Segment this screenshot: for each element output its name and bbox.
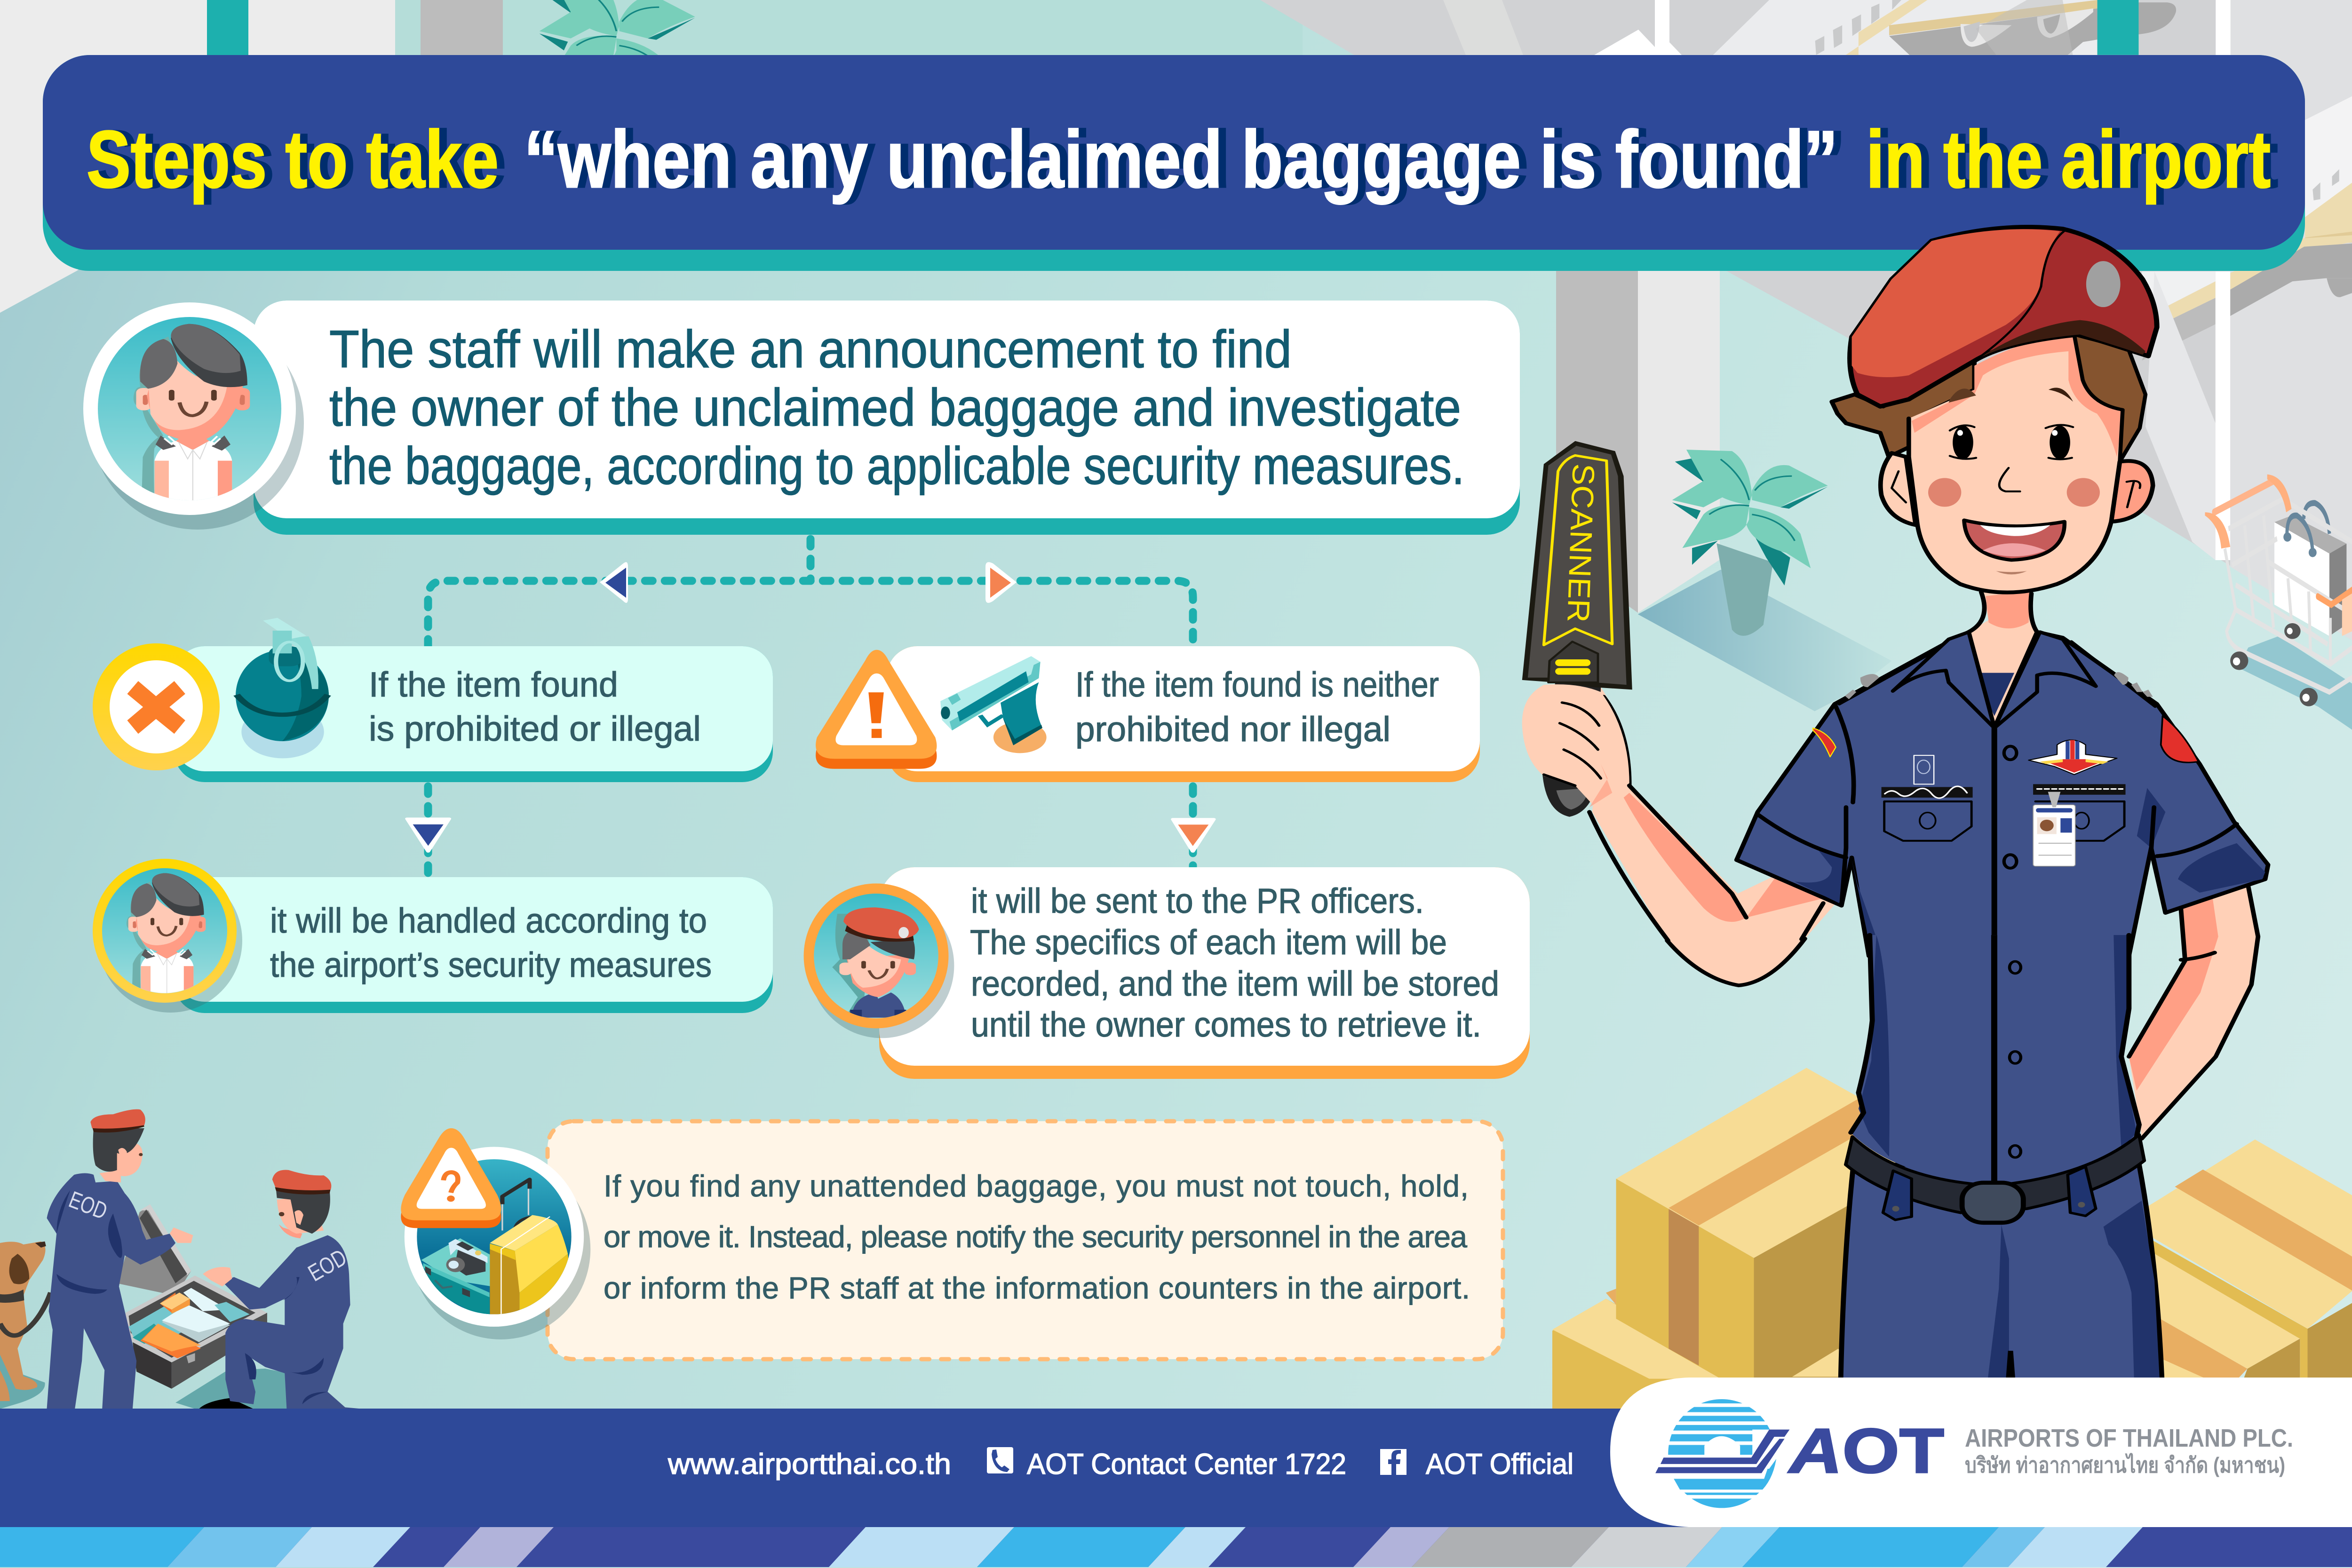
security text: the airport’s security measures [270, 945, 712, 984]
announcement text [329, 320, 1464, 495]
AOT wordmark: AOT [1788, 1416, 1944, 1486]
company name english: AIRPORTS OF THAILAND PLC. [1965, 1424, 2293, 1452]
prohibited text [369, 665, 701, 748]
prohibited text: If the item found [369, 665, 618, 704]
security text: it will be handled according to [270, 901, 707, 940]
potted plant at the top, behind header [540, 0, 695, 117]
arrow: left branch [600, 562, 628, 603]
logo plate [1610, 1378, 2352, 1527]
potted plant beside the scanner [1638, 450, 1891, 711]
icon: facebook [1380, 1449, 1406, 1475]
not prohibited text [1075, 665, 1439, 749]
officer standing [47, 1109, 193, 1409]
dashed connectors [428, 539, 1193, 877]
officer kneeling [199, 1170, 363, 1409]
notice text: If you find any unattended baggage, you must not touch, hold, [604, 1169, 1469, 1203]
PR officers text: it will be sent to the PR officers. [971, 881, 1424, 920]
contact center: AOT Contact Center 1722 [1027, 1448, 1346, 1481]
EOD label standing officer: EOD [65, 1186, 111, 1225]
title banner [43, 55, 2305, 271]
panel: neither prohibited nor illegal [887, 646, 1480, 782]
EOD label kneeling officer: EOD [304, 1244, 351, 1287]
icon: X mark [93, 643, 220, 770]
dog [0, 1242, 51, 1409]
panel: prohibited item [174, 646, 773, 782]
head [1832, 334, 2153, 593]
ID card [2033, 792, 2075, 866]
hand [1522, 684, 1629, 807]
illustration: security officer with scanner [1522, 227, 2268, 1385]
PR officers text: recorded, and the item will be stored [971, 964, 1499, 1003]
announcement text: the owner of the unclaimed baggage and investigate [329, 378, 1461, 437]
prohibited text: is prohibited or illegal [369, 709, 701, 748]
title text: “when any unclaimed baggage is found” [524, 114, 1838, 205]
icon: baggage with question mark [401, 1128, 590, 1339]
icon: PR officer avatar [804, 884, 954, 1038]
arrow: right branch [985, 562, 1017, 603]
title text: in the airport [1866, 114, 2271, 205]
icon: handgun [940, 656, 1047, 753]
company name thai: บริษัท ท่าอากาศยานไทย จำกัด (มหาชน) [1965, 1453, 2285, 1477]
panel: public notice [548, 1121, 1503, 1359]
security text [270, 901, 712, 984]
SCANNER label: SCANNER [1561, 463, 1601, 623]
arrow: right branch down [1173, 819, 1214, 851]
PR officers text: The specifics of each item will be [970, 923, 1447, 962]
red beret [1850, 227, 2157, 406]
raised arm [1589, 687, 1835, 941]
cardboard boxes [1552, 1068, 2352, 1413]
white and grey columns [1556, 271, 1720, 613]
PR officers text [970, 881, 1499, 1044]
footer color stripes [0, 1527, 2352, 1567]
icon: security staff avatar [93, 859, 242, 1013]
AOT logo mark [1649, 1399, 1792, 1508]
metal detector scanner [1522, 441, 1632, 817]
shopping cart with bag [2205, 475, 2352, 730]
not prohibited text: prohibited nor illegal [1075, 710, 1391, 749]
not prohibited text: If the item found is neither [1075, 665, 1439, 704]
icon: grenade [236, 618, 329, 758]
footer bar [0, 1409, 2352, 1567]
panel: PR officers [879, 867, 1530, 1079]
icon: warning triangle [816, 650, 937, 769]
icon: staff avatar [83, 302, 304, 530]
notice text: or inform the PR staff at the information counters in the airport. [604, 1271, 1470, 1305]
officer right arm and raised arm elbow [1654, 884, 2259, 1139]
airplane outside the window [1713, 0, 2352, 560]
notice text [604, 1169, 1470, 1305]
website: www.airportthai.co.th [667, 1448, 951, 1481]
arrow: left branch down [407, 819, 449, 851]
open suitcase [117, 1204, 296, 1409]
PR officers text: until the owner comes to retrieve it. [971, 1005, 1481, 1044]
uniform trousers and belt [1841, 935, 2162, 1385]
illustration: EOD officers inspecting baggage with dog [0, 1109, 363, 1409]
announcement text: the baggage, according to applicable security measures. [329, 436, 1464, 495]
facebook name: AOT Official [1426, 1448, 1573, 1481]
icon: phone [987, 1447, 1013, 1473]
panel: handled by security [174, 877, 773, 1013]
panel: staff announcement [254, 301, 1520, 535]
uniform shirt [1737, 591, 2268, 956]
notice text: or move it. Instead, please notify the security personnel in the area [604, 1220, 1468, 1254]
title text: Steps to take [87, 114, 499, 205]
announcement text: The staff will make an announcement to find [329, 320, 1292, 379]
